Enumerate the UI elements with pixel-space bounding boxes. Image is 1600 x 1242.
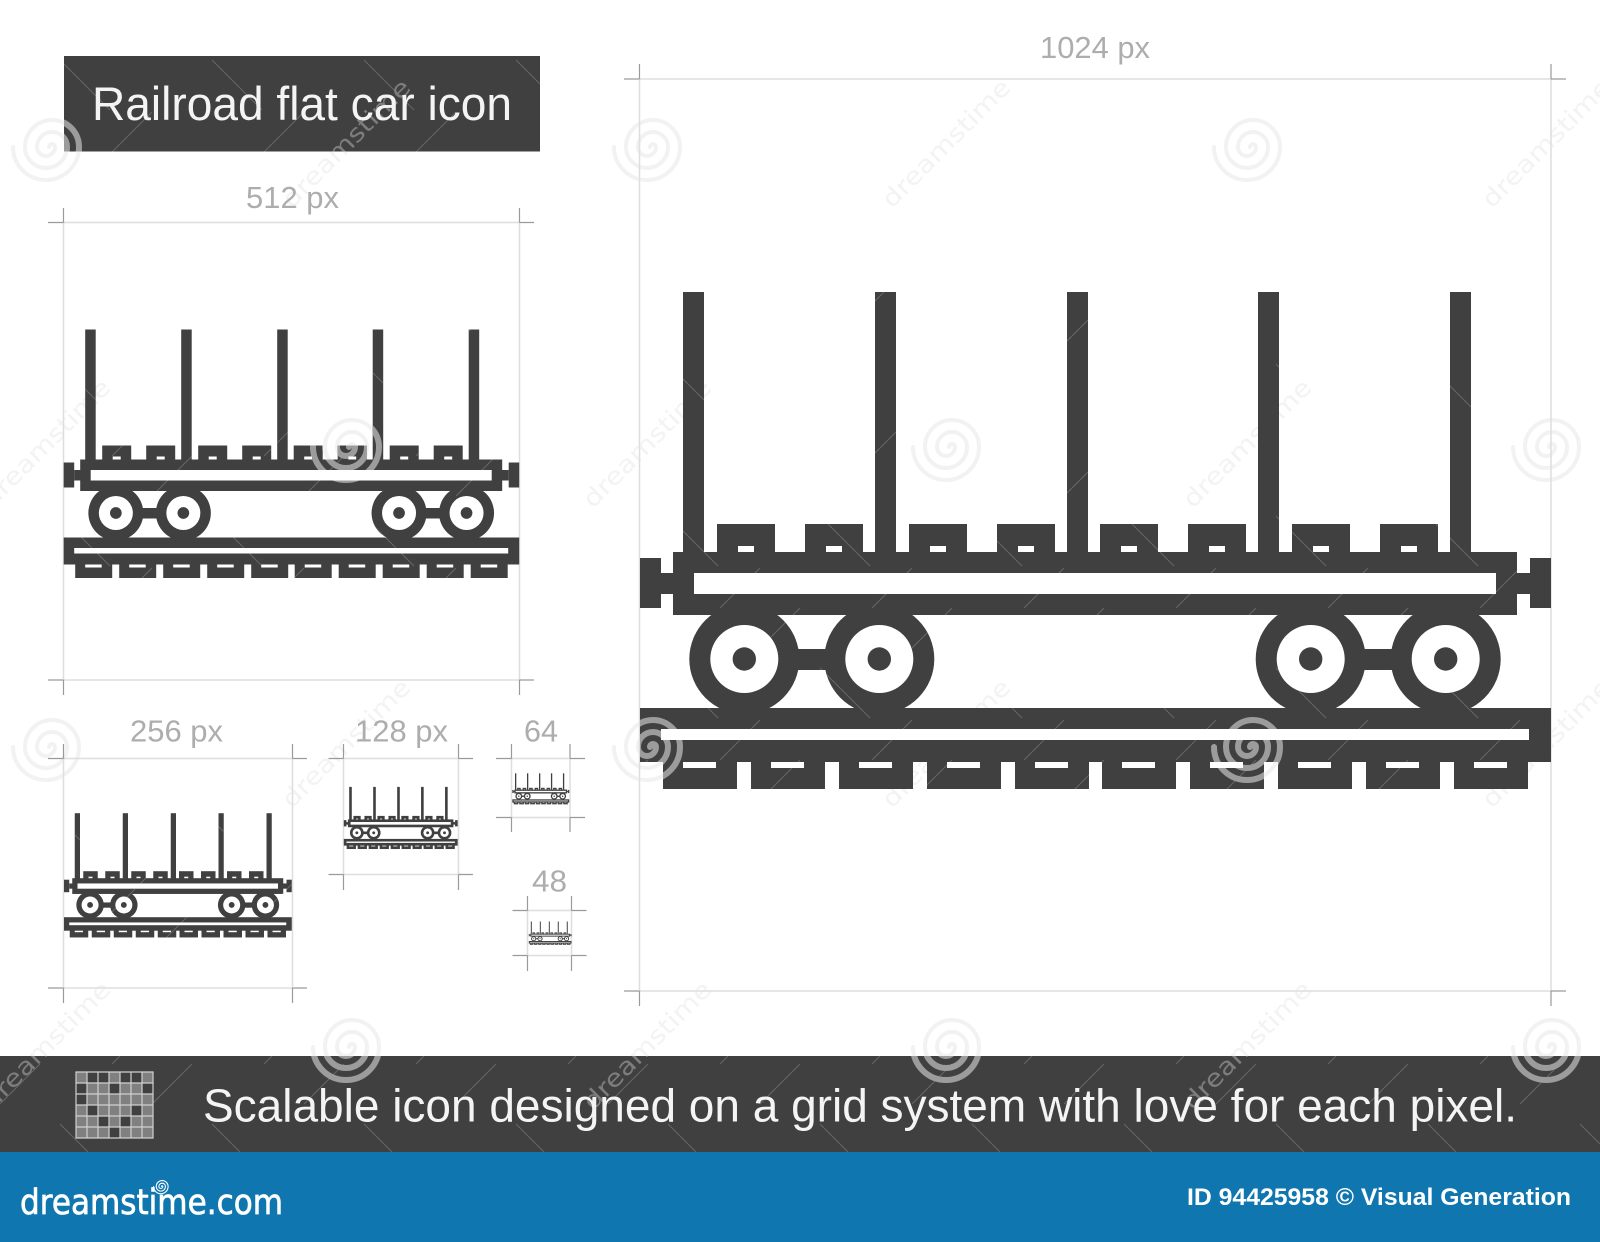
watermark layer on white: dreamstime xyxy=(1476,73,1600,213)
label: 48: 48 xyxy=(532,864,567,898)
label: 512 px: 512 px xyxy=(246,180,339,215)
watermark layer on white: dreamstime xyxy=(276,73,416,213)
watermark layer on white: dreamstime xyxy=(1476,673,1600,813)
watermark layer on white: dreamstime xyxy=(577,373,717,513)
panel: 48 px icon preview xyxy=(512,864,586,971)
label: 64: 64 xyxy=(524,714,558,748)
label: 1024 px: 1024 px xyxy=(1040,30,1150,65)
icon: flat car 64 px xyxy=(512,773,569,804)
icon: flat car 256 px xyxy=(64,813,292,937)
icon: logo spiral xyxy=(154,1181,168,1194)
watermark layer on white: dreamstime xyxy=(276,673,416,813)
watermark overlay on dark shapes: dreamstime xyxy=(577,975,717,1115)
panel: 1024 px icon preview xyxy=(624,30,1566,1006)
label: 256 px: 256 px xyxy=(130,714,223,748)
frame: 128 px guides xyxy=(328,744,473,890)
icon: flat car 48 px xyxy=(529,922,572,945)
icon: flat car 128 px xyxy=(344,787,458,849)
watermark layer on white: dreamstime xyxy=(577,975,717,1115)
icon: flat car 512 px xyxy=(64,330,519,578)
watermark layer on white: dreamstime xyxy=(1177,373,1317,513)
panel: 256 px icon preview xyxy=(48,714,307,1003)
watermark overlay on dark shapes: dreamstime xyxy=(1177,975,1317,1115)
footer dark band xyxy=(0,1056,1600,1152)
frame: 48 px guides xyxy=(512,896,586,971)
blue credit bar xyxy=(0,1152,1600,1242)
frame: 64 px guides xyxy=(496,744,585,832)
panel: 128 px icon preview xyxy=(328,714,473,890)
watermark overlay on dark shapes: dreamstime xyxy=(276,73,416,213)
icon: pixel grid with heart xyxy=(76,1072,153,1138)
watermark layer on white: dreamstime xyxy=(876,673,1016,813)
footer tagline: Scalable icon designed on a grid system with love for each pixel. xyxy=(203,1080,1517,1132)
frame: 512 px guides xyxy=(48,208,534,695)
panel: 512 px icon preview xyxy=(48,180,534,695)
image id and credit: ID 94425958 © Visual Generation xyxy=(1187,1184,1571,1211)
dreamstime logo: dreamstime.com xyxy=(20,1183,283,1223)
frame: 1024 px guides xyxy=(624,64,1566,1006)
title: Railroad flat car icon xyxy=(92,77,512,130)
watermark layer on white: dreamstime xyxy=(1177,975,1317,1115)
panel: 64 px icon preview xyxy=(496,714,585,832)
frame: 256 px guides xyxy=(48,744,307,1003)
title background bar xyxy=(64,56,540,152)
label: 128 px: 128 px xyxy=(355,714,448,748)
icon: flat car 1024 px xyxy=(640,292,1551,789)
watermark layer on white: dreamstime xyxy=(876,73,1016,213)
